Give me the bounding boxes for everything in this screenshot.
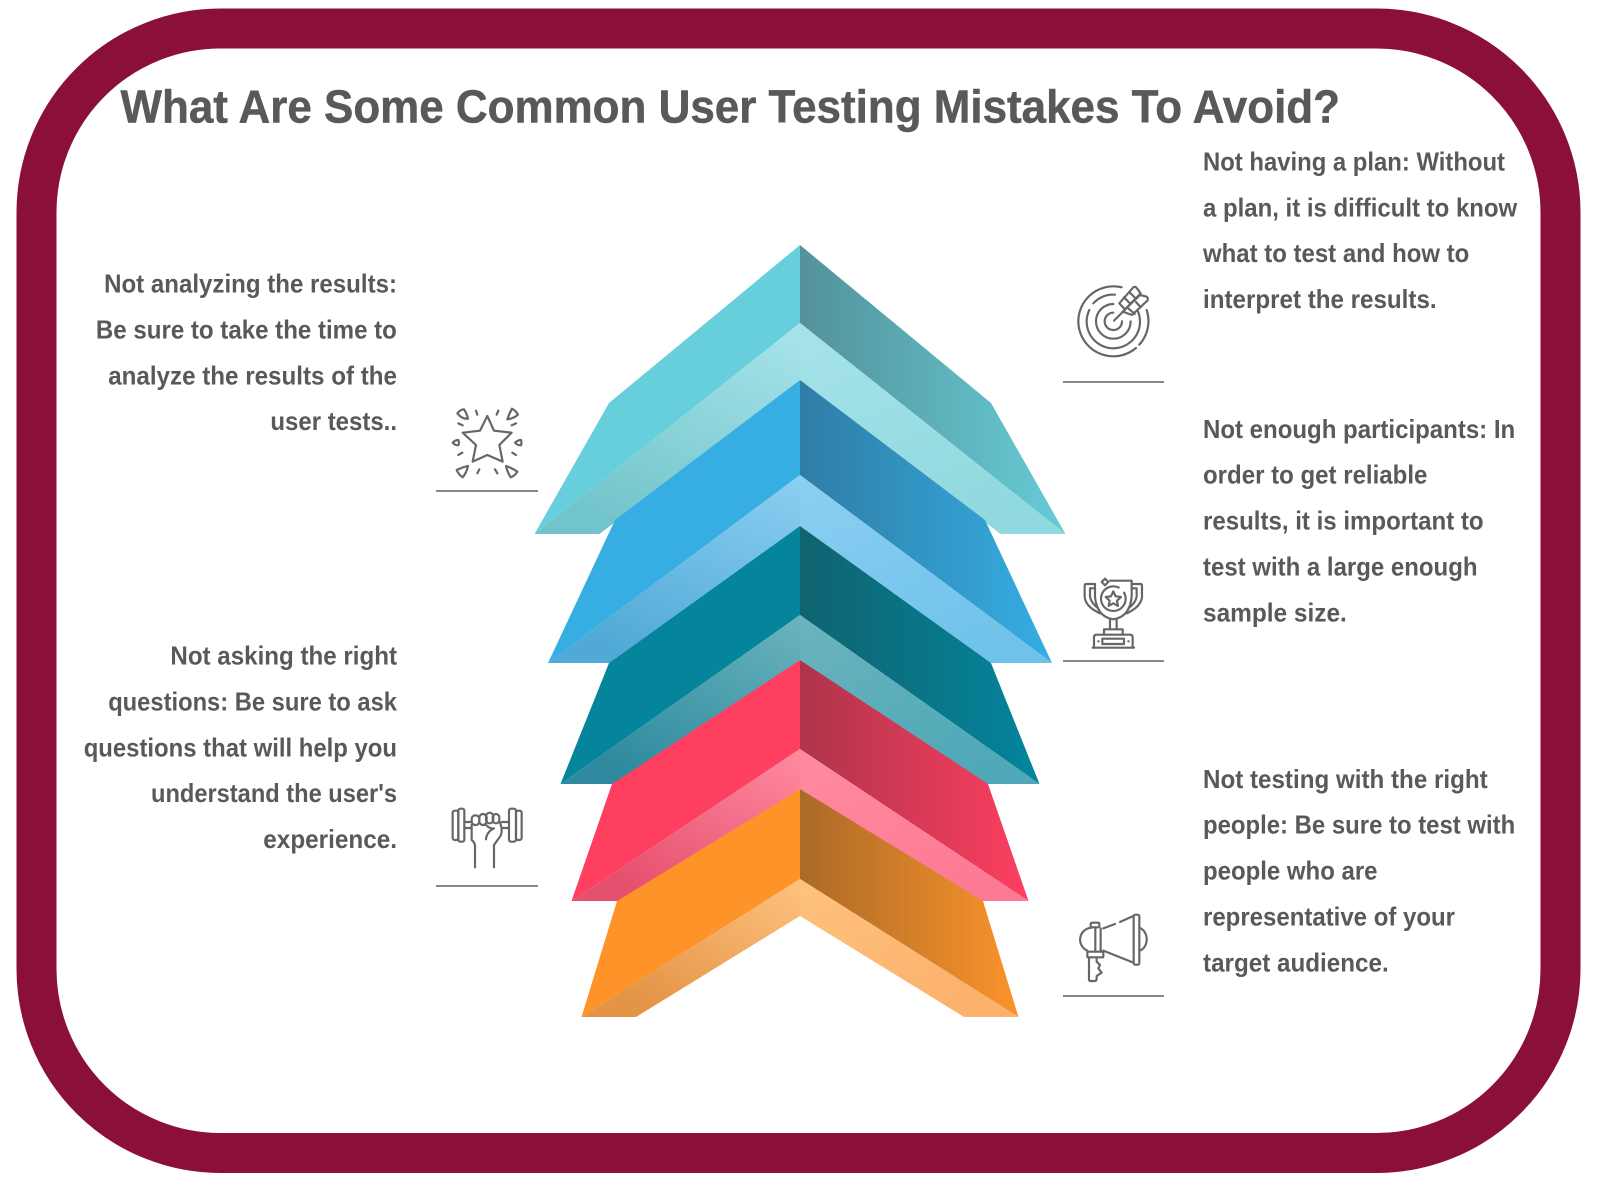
chevron: orange xyxy=(582,789,1018,1017)
text block: not testing with the right people: people who are xyxy=(1203,856,1378,886)
icon: megaphone xyxy=(1080,915,1147,981)
text block: not asking the right questions: Not asking the right xyxy=(170,640,397,670)
text block: not analyzing the results: Not analyzing the results: xyxy=(104,268,397,298)
text block: not asking the right questions: understand the user's xyxy=(151,778,397,808)
text block: not testing with the right people: representative of your xyxy=(1203,902,1455,932)
text block: not analyzing the results: user tests.. xyxy=(270,406,397,436)
text block: not testing with the right people xyxy=(1203,764,1515,977)
text block: not analyzing the results: Be sure to take the time to xyxy=(96,314,397,344)
icon: star with sparkles xyxy=(453,409,521,477)
chevron stack xyxy=(534,245,1066,1017)
icon: trophy xyxy=(1085,579,1142,648)
icon: target with arrow xyxy=(1078,286,1148,356)
icon: fist holding dumbbell xyxy=(453,809,522,867)
text block: not enough participants: Not enough participants: In xyxy=(1203,414,1515,444)
text block: not having a plan xyxy=(1202,146,1518,314)
text block: not enough participants: order to get reliable xyxy=(1203,460,1427,490)
text block: not testing with the right people: target audience. xyxy=(1203,947,1389,977)
text block: not testing with the right people: Not testing with the right xyxy=(1203,764,1488,794)
chevron: red xyxy=(572,660,1028,901)
text block: not asking the right questions: experience. xyxy=(263,824,397,854)
chevron: top teal xyxy=(534,245,1066,534)
text block: not having a plan: what to test and how to xyxy=(1202,238,1469,268)
chevron: dark teal xyxy=(560,526,1040,784)
text block: not analyzing the results xyxy=(96,268,397,436)
text block: not enough participants: results, it is important to xyxy=(1203,506,1484,536)
text block: not having a plan: Not having a plan: Without xyxy=(1203,146,1505,176)
text block: not enough participants: sample size. xyxy=(1203,597,1347,627)
text block: not enough participants: test with a large enough xyxy=(1203,552,1478,582)
text block: not analyzing the results: analyze the results of the xyxy=(108,360,397,390)
text block: not asking the right questions xyxy=(84,640,397,854)
text block: not testing with the right people: people: Be sure to test with xyxy=(1203,810,1515,840)
text block: not asking the right questions: questions that will help you xyxy=(84,732,397,762)
text block: not having a plan: interpret the results. xyxy=(1203,284,1437,314)
text block: not asking the right questions: questions: Be sure to ask xyxy=(108,686,397,716)
text block: not enough participants xyxy=(1203,414,1515,627)
chevron: blue xyxy=(548,380,1052,663)
title: What Are Some Common User Testing Mistakes To Avoid? xyxy=(120,80,1340,132)
text block: not having a plan: a plan, it is difficult to know xyxy=(1203,192,1518,222)
